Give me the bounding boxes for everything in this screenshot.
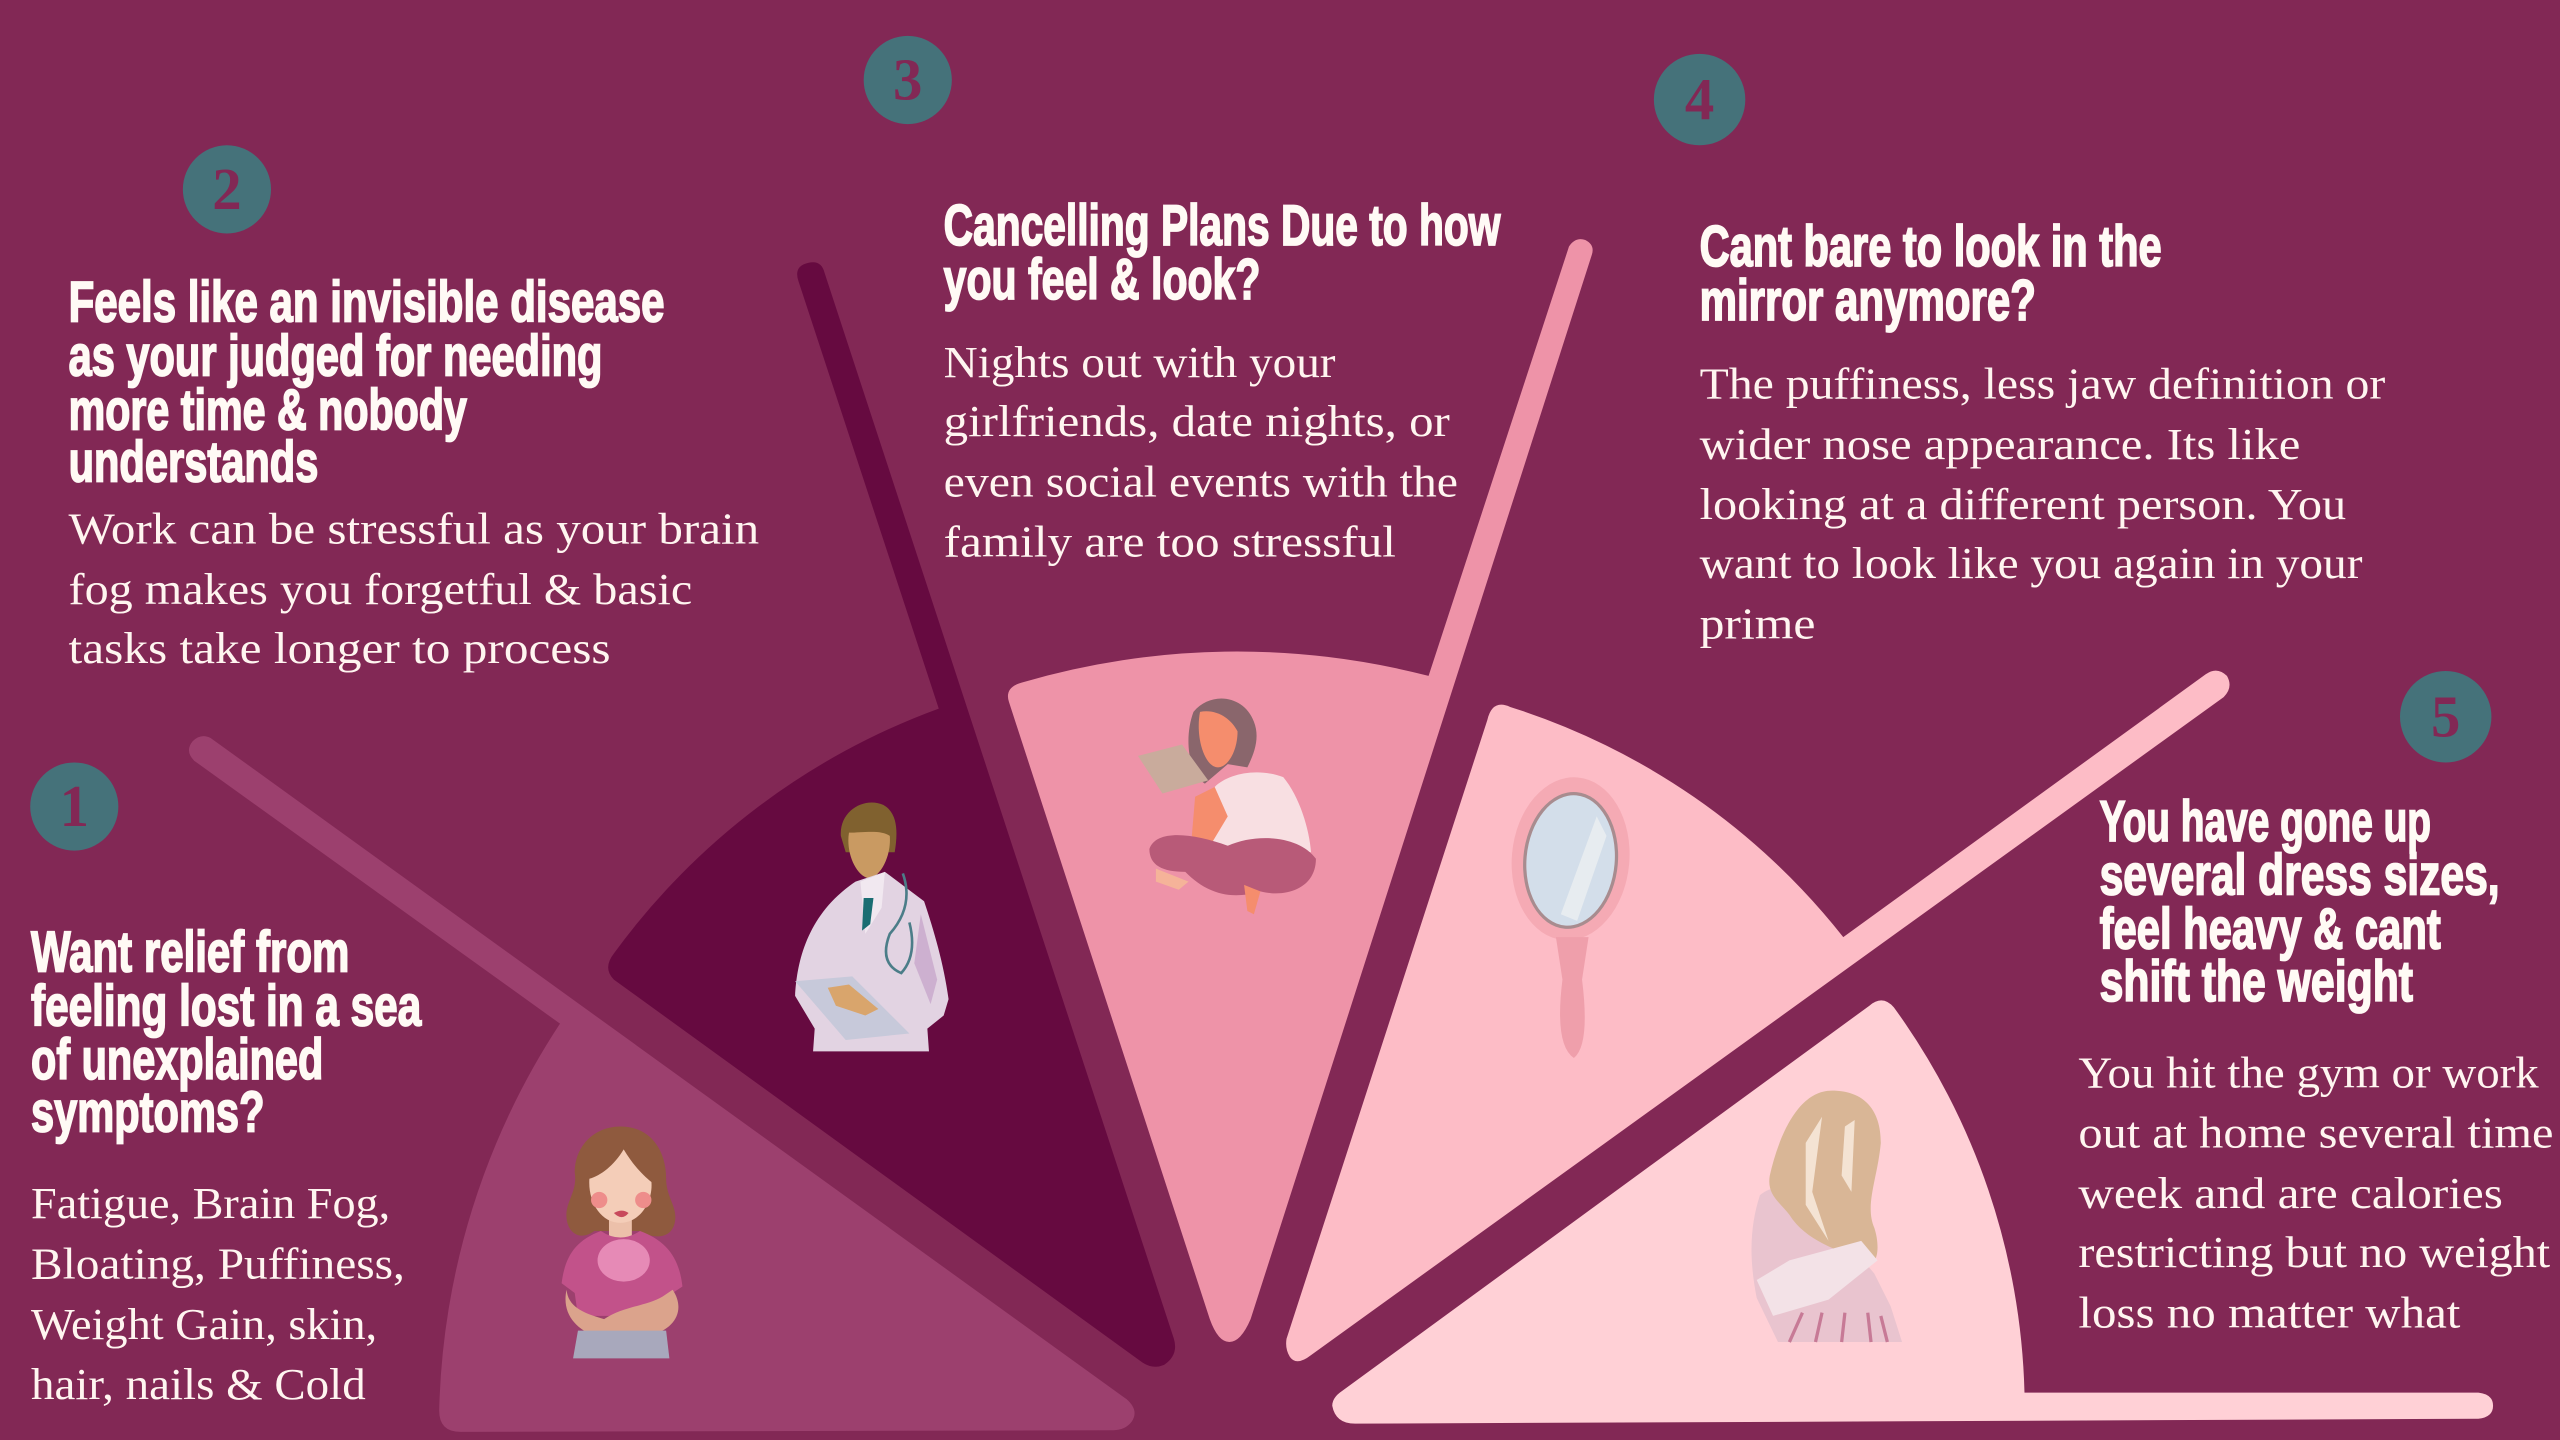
heading 2: more time & nobody (69, 378, 467, 442)
text block 3: Nights out with your (944, 338, 1336, 387)
panel: sector 2 (608, 262, 1175, 1367)
heading 1: feeling lost in a sea (31, 974, 422, 1038)
heading 4: mirror anymore? (1700, 269, 2036, 333)
text block 4 (1700, 359, 2386, 648)
panel: sector 1 (189, 736, 1135, 1432)
heading 4: Cant bare to look in the (1700, 215, 2162, 279)
text block 5: out at home several time (2078, 1109, 2553, 1158)
icon: sick woman (562, 1127, 682, 1358)
text block 3: even social events with the (944, 457, 1458, 506)
text block 4: want to look like you again in your (1700, 539, 2363, 588)
icon: woman reading (1138, 699, 1316, 914)
text block 1: Weight Gain, skin, (31, 1300, 377, 1349)
text block 5 (2078, 1048, 2553, 1337)
heading 1: of unexplained (31, 1028, 323, 1092)
heading 1 (31, 920, 422, 1144)
text block 1: Fatigue, Brain Fog, (31, 1179, 390, 1228)
heading 4 (1700, 215, 2162, 333)
heading 2 (69, 271, 664, 495)
text block 3: girlfriends, date nights, or (944, 397, 1450, 446)
heading 2: Feels like an invisible disease (69, 271, 664, 335)
heading 1: Want relief from (31, 920, 349, 984)
text block 5: week and are calories (2078, 1169, 2503, 1218)
text block 4: The puffiness, less jaw definition or (1700, 359, 2386, 408)
heading 3: Cancelling Plans Due to how (944, 194, 1501, 258)
heading 1: symptoms? (31, 1080, 264, 1144)
text block 4: wider nose appearance. Its like (1700, 420, 2300, 469)
text block 3: family are too stressful (944, 518, 1396, 567)
badge 2: 2 (212, 157, 242, 222)
badge 5 (2400, 671, 2491, 762)
heading 2: as your judged for needing (69, 325, 602, 389)
text block 3 (944, 338, 1458, 567)
text block 5: restricting but no weight (2078, 1228, 2550, 1277)
text block 1: Bloating, Puffiness, (31, 1239, 405, 1288)
badge 3 (864, 36, 952, 124)
text block 1: hair, nails & Cold (31, 1360, 366, 1409)
text block 2: tasks take longer to process (69, 624, 611, 673)
heading 3 (944, 194, 1501, 312)
text block 5: loss no matter what (2078, 1288, 2460, 1337)
badge 4 (1654, 54, 1745, 145)
badge 3: 3 (893, 48, 922, 113)
text block 5: You hit the gym or work (2078, 1048, 2540, 1097)
icon: hand mirror (1505, 772, 1636, 1058)
badge 4: 4 (1685, 67, 1714, 132)
text block 2 (69, 505, 759, 673)
panel: sector 3 (1008, 239, 1593, 1342)
text block 2: fog makes you forgetful & basic (69, 565, 692, 614)
badge 1: 1 (60, 774, 89, 839)
badge 5: 5 (2431, 684, 2460, 749)
heading 5: feel heavy & cant (2100, 898, 2441, 962)
icon: blonde woman (1752, 1091, 1902, 1342)
panel: sector 4 (1286, 671, 2230, 1361)
text block 2: Work can be stressful as your brain (69, 505, 759, 554)
badge 2 (183, 145, 271, 233)
text block 4: prime (1700, 599, 1816, 648)
icon: doctor (795, 802, 949, 1051)
text block 1 (31, 1179, 405, 1409)
text block 4: looking at a different person. You (1700, 480, 2346, 529)
heading 5 (2100, 790, 2500, 1014)
badge 1 (30, 762, 118, 851)
heading 3: you feel & look? (944, 248, 1260, 312)
panel: sector 5 (1332, 1000, 2493, 1424)
heading 2: understands (69, 431, 318, 495)
heading 5: shift the weight (2100, 950, 2413, 1014)
